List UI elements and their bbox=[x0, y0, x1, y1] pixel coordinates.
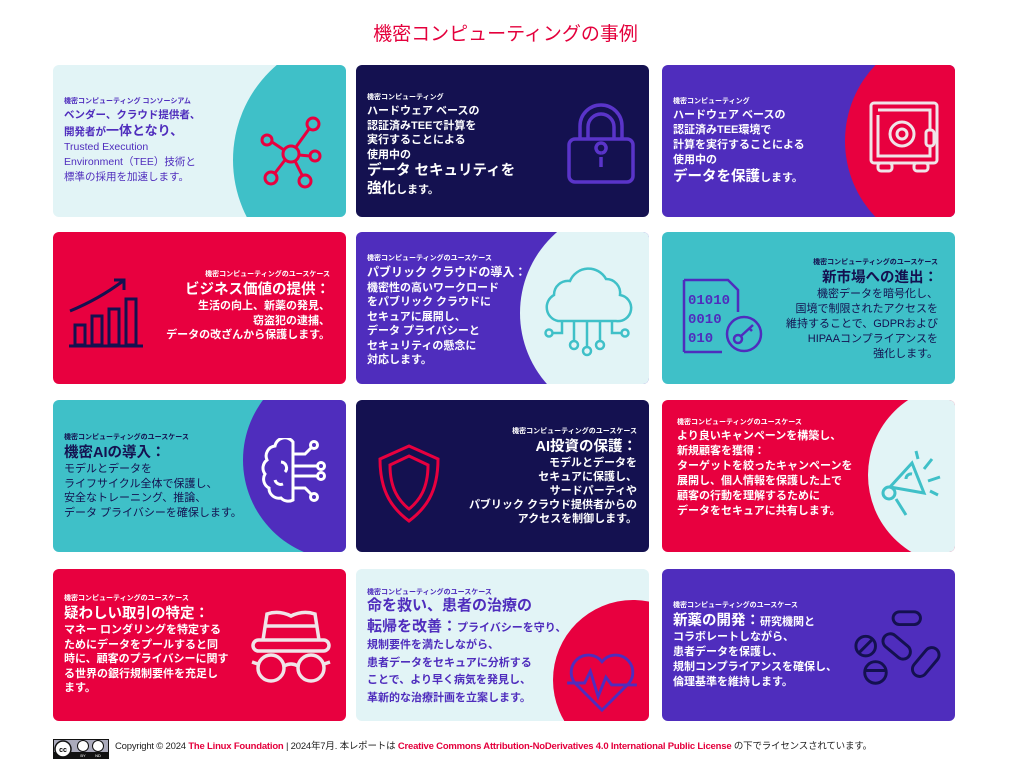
text: AI investment: AI投資の保護： bbox=[536, 439, 637, 455]
text: healthcare: 革新的な治療計画を立案します。 bbox=[367, 692, 531, 704]
text: healthcare: 規制要件を満たしながら、 bbox=[367, 639, 499, 651]
panel: suspicious transactions bbox=[53, 569, 346, 721]
text: public cloud: 機密性の高いワークロード bbox=[367, 282, 499, 294]
text: public cloud: データ プライバシーと bbox=[367, 325, 480, 337]
text: data security: 機密コンピューティング bbox=[367, 94, 444, 101]
text: protect data bbox=[673, 96, 805, 185]
text: business value: ビジネス価値の提供： bbox=[185, 282, 330, 298]
icon: encrypted file: 010 bbox=[688, 331, 713, 347]
text: consortium: 機密コンピューティング コンソーシアム bbox=[64, 98, 191, 105]
text: business value: データの改ざんから保護します。 bbox=[166, 329, 330, 341]
text: public cloud: 機密コンピューティングのユースケース bbox=[367, 255, 492, 262]
text: new markets: 維持することで、GDPRおよび bbox=[786, 318, 938, 330]
text: campaigns: 顧客の行動を理解するために bbox=[677, 490, 820, 502]
panel: new markets bbox=[662, 232, 955, 384]
text: confidential AI: モデルとデータを bbox=[64, 463, 152, 475]
text: drug discovery: 新薬の開発：研究機関と bbox=[673, 613, 815, 629]
text: business value: 窃盗犯の逮捕、 bbox=[253, 314, 330, 326]
text: public cloud: 対応します。 bbox=[367, 354, 432, 366]
text: campaigns: 展開し、個人情報を保護した上で bbox=[677, 475, 842, 487]
icon: encrypted file: 01010 bbox=[688, 293, 730, 309]
text: confidential AI: 機密コンピューティングのユースケース bbox=[64, 434, 189, 441]
panel: public cloud bbox=[356, 232, 649, 384]
icon: brain bbox=[262, 438, 326, 503]
text: data security: 強化します。 bbox=[367, 181, 439, 197]
text: suspicious transactions: ます。 bbox=[64, 682, 96, 694]
text: new markets: 国境で制限されたアクセスを bbox=[796, 303, 938, 315]
text: protect data: 使用中の bbox=[673, 154, 717, 166]
panel: campaigns bbox=[662, 400, 955, 552]
text: AI investment: モデルとデータを bbox=[549, 457, 637, 469]
text: drug discovery: 規制コンプライアンスを確保し、 bbox=[673, 661, 837, 673]
text: confidential AI: データ プライバシーを確保します。 bbox=[64, 506, 242, 518]
text: business value bbox=[166, 270, 330, 341]
text: suspicious transactions: マネー ロンダリングを特定する bbox=[64, 624, 221, 636]
text: data security: 実行することによる bbox=[367, 134, 466, 146]
panel: healthcare bbox=[356, 569, 649, 721]
text: AI investment: サードパーティや bbox=[550, 485, 637, 497]
icon: cloud circuit bbox=[544, 267, 632, 356]
text: AI investment: アクセスを制御します。 bbox=[518, 513, 637, 525]
text: campaigns: ターゲットを絞ったキャンペーンを bbox=[677, 460, 852, 472]
text: public cloud: パブリック クラウドの導入： bbox=[367, 265, 526, 279]
text: new markets bbox=[786, 258, 938, 360]
text: confidential AI: 安全なトレーニング、推論、 bbox=[64, 492, 206, 504]
text: suspicious transactions: 時に、顧客のプライバシーに関す bbox=[64, 653, 228, 665]
icon: heart bbox=[567, 654, 637, 712]
icon: megaphone bbox=[882, 450, 940, 516]
text: healthcare: 機密コンピューティングのユースケース bbox=[367, 589, 492, 596]
icon: encrypted file: 0010 bbox=[688, 312, 722, 328]
text: campaigns: データをセキュアに共有します。 bbox=[677, 505, 841, 517]
text: campaigns: 機密コンピューティングのユースケース bbox=[677, 419, 802, 426]
text: protect data: 認証済みTEE環境で bbox=[673, 124, 771, 136]
text: data security: ハードウェア ベースの bbox=[367, 105, 480, 117]
text: suspicious transactions: 機密コンピューティングのユースケース bbox=[64, 595, 189, 602]
panel: business value bbox=[53, 232, 346, 384]
icon: lock bbox=[567, 103, 635, 184]
panel: confidential AI bbox=[53, 400, 346, 552]
text: new markets: 機密コンピューティングのユースケース bbox=[813, 259, 938, 266]
icon: encrypted file bbox=[682, 278, 762, 354]
text: data security: データ セキュリティを bbox=[367, 163, 515, 179]
text: campaigns: より良いキャンペーンを構築し、 bbox=[677, 430, 841, 442]
text: healthcare: ことで、より早く病気を発見し、 bbox=[367, 674, 531, 686]
text: confidential AI bbox=[64, 432, 242, 518]
text: confidential AI: 機密AIの導入： bbox=[64, 445, 166, 461]
text: public cloud: セキュアに展開し、 bbox=[367, 310, 466, 322]
icon: safe bbox=[870, 102, 938, 172]
icon: pills bbox=[854, 610, 940, 685]
text: healthcare bbox=[367, 588, 566, 704]
text: data security: 認証済みTEEで計算を bbox=[367, 120, 476, 132]
text: consortium: 開発者が一体となり、 bbox=[64, 123, 183, 138]
text: healthcare: 命を救い、患者の治療の bbox=[367, 597, 532, 614]
footer: license bbox=[53, 739, 872, 759]
text: protect data: 機密コンピューティング bbox=[673, 98, 750, 105]
icon: cc by nd: cc bbox=[59, 747, 67, 754]
icon: cc by nd: BY bbox=[80, 753, 86, 758]
text: new markets: 新市場への進出： bbox=[822, 270, 938, 286]
text: data security bbox=[367, 92, 515, 197]
text: protect data: データを保護します。 bbox=[673, 169, 803, 185]
text: consortium: Environment（TEE）技術と bbox=[64, 156, 196, 168]
panel: consortium bbox=[53, 65, 346, 217]
icon: cc by nd: ND bbox=[95, 753, 101, 758]
text: drug discovery: 患者データを保護し、 bbox=[673, 646, 783, 658]
text: confidential AI: ライフサイクル全体で保護し、 bbox=[64, 478, 217, 490]
text: campaigns bbox=[677, 418, 852, 517]
text: consortium: Trusted Execution bbox=[64, 141, 148, 153]
text: new markets: 機密データを暗号化し、 bbox=[817, 288, 938, 300]
text: AI investment: セキュアに保護し、 bbox=[538, 471, 637, 483]
text: suspicious transactions bbox=[64, 594, 228, 694]
text: suspicious transactions: る世界の銀行規制要件を充足し bbox=[64, 668, 218, 680]
text: AI investment bbox=[469, 426, 637, 525]
text: campaigns: 新規顧客を獲得： bbox=[677, 445, 765, 457]
panel: AI investment bbox=[356, 400, 649, 552]
text: AI investment: パブリック クラウド提供者からの bbox=[469, 499, 637, 511]
text: consortium: ベンダー、クラウド提供者、 bbox=[64, 109, 200, 121]
icon: shield bbox=[378, 444, 440, 523]
text: data security: 使用中の bbox=[367, 148, 411, 160]
text: protect data: ハードウェア ベースの bbox=[673, 109, 786, 121]
icon: cc by nd bbox=[53, 739, 109, 759]
panel: drug discovery bbox=[662, 569, 955, 721]
icon: hat and glasses bbox=[251, 610, 331, 683]
title: 機密コンピューティングの事例 bbox=[373, 24, 638, 45]
text: public cloud bbox=[367, 254, 526, 366]
text: public cloud: セキュリティの懸念に bbox=[367, 340, 476, 352]
icon: network bbox=[260, 116, 322, 188]
text: healthcare: 転帰を改善：プライバシーを守り、 bbox=[367, 618, 566, 634]
text: protect data: 計算を実行することによる bbox=[673, 139, 805, 151]
text: drug discovery: 機密コンピューティングのユースケース bbox=[673, 602, 798, 609]
text: business value: 機密コンピューティングのユースケース bbox=[205, 271, 330, 278]
text: drug discovery bbox=[673, 600, 837, 688]
icon: growth chart bbox=[69, 278, 143, 348]
text: consortium bbox=[64, 96, 200, 183]
text: new markets: HIPAAコンプライアンスを bbox=[808, 333, 938, 345]
text: healthcare: 患者データをセキュアに分析する bbox=[367, 656, 532, 668]
panel: data security bbox=[356, 65, 649, 217]
text: consortium: 標準の採用を加速します。 bbox=[64, 171, 189, 183]
text: suspicious transactions: ためにデータをプールすると同 bbox=[64, 638, 218, 650]
text: drug discovery: コラボレートしながら、 bbox=[673, 631, 794, 643]
text: AI investment: 機密コンピューティングのユースケース bbox=[512, 428, 637, 435]
text: new markets: 強化します。 bbox=[873, 348, 938, 360]
footer: license: Copyright © 2024 The Linux Foundation | 2024年7月. 本レポートは Creative Commons Attribution-NoDerivatives 4.0 International Public License の下でライセンスされています。 bbox=[115, 741, 872, 752]
text: drug discovery: 倫理基準を維持します。 bbox=[673, 676, 793, 688]
text: suspicious transactions: 疑わしい取引の特定： bbox=[64, 606, 209, 622]
panel: protect data bbox=[662, 65, 955, 217]
text: business value: 生活の向上、新薬の発見、 bbox=[198, 300, 330, 312]
text: public cloud: をパブリック クラウドに bbox=[367, 296, 491, 308]
